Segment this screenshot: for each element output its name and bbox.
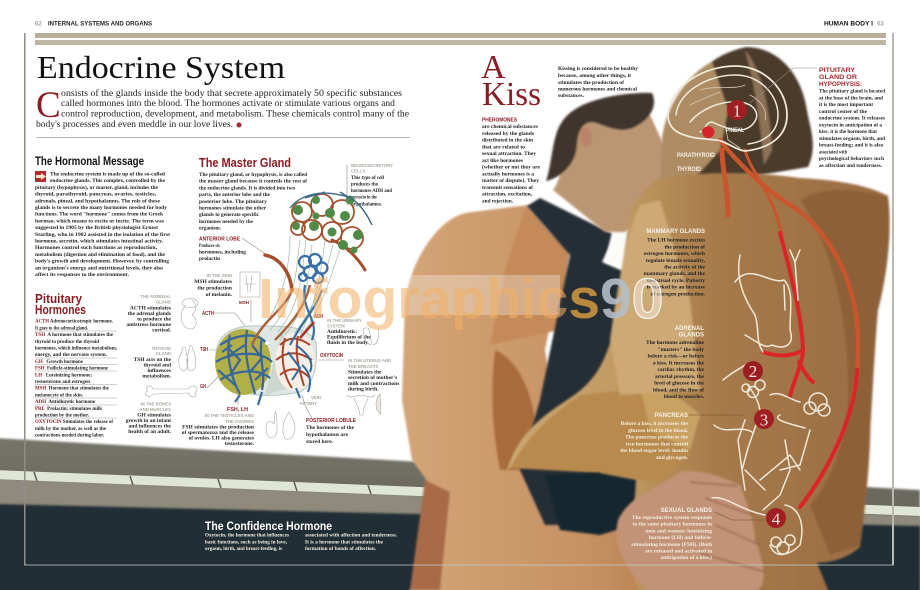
panel: adrenal glands: before a risk—or before [648,354,705,360]
arteries and veins [265,255,292,290]
panel: pheromones: released by the glands [482,131,534,137]
gap between figures [605,225,635,270]
panel: uterus and breasts: Stimulates the [348,370,382,376]
body text: organism. [199,226,222,232]
panel: thyroid gland: GLAND [156,351,171,356]
panel: uterus and breasts: during birth. [348,386,379,392]
anterior lobe note [199,237,246,262]
gland labels: MSH [239,300,249,306]
panel: pheromones: distributed in the skin [482,138,533,144]
kissing intro text: Kissing is considered to be healthy [558,66,638,72]
circle marker 3: 3 [760,410,768,430]
body text: parts, the anterior lobe and the [199,192,271,198]
panel: thyroid gland: THYROID [152,346,171,351]
body text: the endocrine glands. It is divided into two [199,185,295,191]
panel: mammary glands: menstrual cycle. Puberty [646,278,705,284]
body text: an organism's energy and nutritional levels, they also [35,265,163,271]
heading: a kiss [481,49,541,113]
photo: kissing couple [402,47,890,590]
panel: pheromones: that are related to [482,144,525,150]
heading: The Master Gland [199,155,291,170]
panel: urinary system: Antidiuretic. [327,329,358,335]
panel: pituitary gland or hypophysis: PITUITARY [819,67,856,74]
panel: sexual glands: to the same pituitary hormones in [633,522,712,528]
hormone list: production by the mother. [35,412,90,418]
neurosecretory cell cluster [290,192,372,254]
hormone list: OXYTOCIN Stimulates the release of [35,419,113,425]
body text: Hormones control such functions as reproduction, [35,245,158,251]
panel: in the skin: the production [197,286,232,292]
body text: formation of bonds of affection. [305,546,377,552]
panel: pancreas: and glycogen. [656,455,689,461]
icon: testes and ovary [266,412,295,439]
panel: pituitary gland or hypophysis: endocrine system. It releases [819,116,885,122]
panel: pancreas: PANCREAS [655,413,688,419]
gland labels on photo: PARATHYROID [677,153,716,159]
gland labels: ARTERY [299,401,317,406]
kissing intro text: substances. [558,93,585,99]
panel: sexual glands: stimulating hormone (FSH). (Both [631,541,712,548]
neurosecretory cells note [347,163,393,207]
leader lines [207,238,344,418]
header right: 63 [877,22,884,28]
panel: pancreas: Before a kiss, it increases the [621,421,689,427]
hormone list: LH Luteinizing hormone; [35,372,92,378]
panel: adrenal glands: ADRENAL [675,326,704,332]
panel: pheromones: attraction, excitation, [482,192,533,198]
body text: hormao, which means to excite or incite. The term was [35,218,164,224]
panel: pheromones: transmit sensations of [482,185,533,191]
diagram: hormone vessels [720,140,858,507]
title: Endocrine System [37,49,285,85]
hormone list: MSH Hormone that stimulates the [35,386,110,392]
panel: adrenal glands [646,326,705,400]
panel: testicles and ovaries: FSH stimulates the production [182,424,254,430]
photo background: wall and dark ground [0,438,920,590]
panel: pancreas: glucose level in the blood. [628,428,689,434]
panel: adrenal glands: blood to muscles. [664,394,705,400]
gland labels: ADH [314,314,323,320]
circle marker 2: 2 [749,362,757,381]
gland labels: ACTH [202,311,214,317]
panel: adrenal glands: GLANDS [679,333,704,339]
hormone list: GH Growth hormone [35,359,83,365]
panel: adrenal glands: arterial pressure, the [655,374,705,380]
body text: Starling, who in 1902 assisted in the isolation of the first [35,232,170,238]
panel: mammary glands: is marked by an increase [647,285,706,291]
hormone list: It goes to the adrenal gland. [35,325,89,331]
panel: urinary system: IN THE URINARY [327,318,362,323]
drop cap: C [36,85,61,126]
icon: skin section [240,272,260,297]
panel: posterior lobule: hypothalamus are [306,432,349,438]
man's jacket [402,205,700,590]
diagram: brain outline [668,66,787,151]
panel: pituitary gland or hypophysis: breast-feeding; and it is also [819,143,883,149]
panel: pituitary gland or hypophysis [750,67,885,169]
panel: adrenal glands: a kiss. It increases the [653,360,705,366]
panel: urinary system: fluids in the body. [327,340,370,346]
panel: mammary glands: The LH hormone excites [647,238,705,244]
panel: uterus and breasts: THE BREASTS [348,364,378,369]
panel: adrenal glands: The hormone adrenaline [646,340,705,346]
panel: urinary system: Equilibrium of the [327,334,371,340]
intro text: called hormones into the blood. The hormones activate or stimulate various organs and [61,99,395,109]
panel: sexual glands: anticipation of a kiss.) [660,554,712,561]
panel: in the skin: of melanin. [206,292,233,298]
neurosecretory cells note: CELLS [351,168,365,174]
panel: bones and muscles: IN THE BONES [140,402,171,407]
panel: pheromones: actually hormones is a [482,171,534,177]
hormone list: hormones, which influence metabolism, [35,346,118,352]
body text: suggested in 1905 by the British physiologist Ernest [35,225,158,231]
panel: adrenal gland [126,294,198,334]
panel: pituitary hormones [35,292,118,439]
hormone list: energy, and the nervous system. [35,352,108,358]
panel: in the skin: IN THE SKIN [206,273,232,278]
watermark: Infographics90 [258,267,663,331]
gland labels: TSH [200,347,208,353]
heading: a kiss: Kiss [482,76,541,113]
gland labels on photo [677,128,744,173]
neurosecretory cells note: NEUROSECRETORY [351,163,393,168]
body text [199,172,307,232]
heading: Pituitary [35,292,82,306]
panel: pituitary gland or hypophysis: associated with [819,149,847,155]
body text [205,533,398,552]
icon: pituitary spot [702,126,714,138]
panel: pheromones: sexual attraction. They [482,151,536,157]
panel: adrenal glands: level of glucose in the [654,380,705,386]
body text: pituitary (hypophysis), or master, gland, includes the [35,184,159,191]
panel: urinary system: SYSTEM [327,324,345,328]
anterior lobe note: hormones, including [199,250,246,256]
heading: a kiss: A [481,49,506,86]
panel: adrenal gland: cortisol. [152,328,172,334]
panel: mammary glands: regulate female sexuality, [646,258,706,264]
man's dark shirt [520,198,625,525]
icon: adrenal and kidney [181,298,198,329]
heading: The Confidence Hormone [205,519,332,533]
kissing intro text [558,66,638,99]
intro text: body's processes and even meddle in our love lives. [36,120,233,130]
circle marker 3 [754,409,774,430]
posterior lobe network [275,333,315,392]
body text: glands to generate specific [199,212,260,218]
panel: bones and muscles: AND MUSCLES [139,407,171,412]
woman's hood and jacket [507,173,890,590]
neurosecretory cells note: hormones ADH and [351,188,392,194]
chart: pituitary gland illustration [200,192,372,418]
blue plexus [299,254,328,283]
panel: mammary glands: estrogen hormones, which [644,251,705,257]
body text: hormone, secretin, which stimulates intestinal activity. [35,238,164,244]
icon: bone [146,386,197,397]
panel: thyroid gland: TSH acts on the [134,357,172,363]
panel: testicles and ovaries: of ovules. LH also generates [188,436,254,442]
intro text [36,85,409,130]
panel: posterior lobule: stored here. [306,439,334,445]
panel: the confidence hormone [205,519,398,552]
woman's hand [617,471,765,590]
panel: posterior lobule: POSTERIOR LOBULE [306,418,356,424]
panel: pituitary gland or hypophysis: GLAND OR [819,74,857,81]
panel: pituitary gland or hypophysis: psychological behaviors such [819,156,884,162]
body text: hormones needed by the [199,219,254,225]
circle marker 2 [743,361,763,381]
gland labels on photo: PINEAL [726,128,744,134]
icon: kidneys [363,328,379,345]
intro text: control reproduction, development, and metabolism. These chemicals control many of the [61,108,409,120]
hormone list: ADH Antidiuretic hormone [35,399,96,405]
panel: mammary glands: mammary glands, and the [644,271,706,277]
panel: adrenal glands: blood, and the flow of [653,387,704,393]
panel: pituitary gland or hypophysis: control center of the [819,109,868,115]
gland labels [200,300,343,406]
panel: bones and muscles: GH stimulates [137,413,171,419]
panel: mammary glands: the activity of the [664,264,706,270]
panel: testicles and ovaries: THE OVARIES [225,419,254,424]
panel: pheromones: are chemical substances [482,124,538,130]
hormone list: ACTH Adrenocorticotropic hormone. [35,319,114,325]
kissing intro text: numerous hormones and chemical [558,86,637,92]
panel: pancreas: The pancreas produces the [625,435,689,441]
header left: 62 [35,22,42,28]
panel: pheromones: PHEROMONES [482,118,517,124]
panel: in the skin: MSH stimulates [194,279,232,285]
panel: pituitary gland or hypophysis: oxytocin in anticipation of a [819,122,882,128]
heading [35,292,86,317]
icon: uterus and breast [347,394,381,415]
panel: sexual glands: men and women: luteinizing [646,528,712,534]
anterior lobe note: Produces six [199,243,220,249]
anterior lobe note: ANTERIOR LOBE [199,237,240,243]
body text: adrenals, pineal, and hypothalamus. The role of these [35,198,161,204]
panel: testicles and ovaries [182,407,295,447]
hormone list: PRL Prolactin: stimulates milk [35,406,103,412]
panel: the master gland text [199,155,393,262]
panel: pheromones: act like hormones [482,158,523,164]
neurosecretory cells note: produces the [351,182,379,188]
panel: adrenal glands: cardiac rhythm, the [657,367,705,373]
panel: uterus and breasts: IN THE UTERUS AND [348,358,391,363]
body text: associated with affection and tenderness. [305,533,398,539]
gland labels: GH [200,384,206,390]
gland labels on photo: THYROID [677,167,702,173]
panel: pheromones: (whether or not they are [482,164,541,170]
panel: testicles and ovaries: of spermatozoa and the release [182,430,255,436]
panel: thyroid gland: thyroid and [143,363,171,369]
panel: testicles and ovaries: FSH, LH [227,407,248,413]
panel: pituitary gland or hypophysis: stimulates orgasm, birth, and [819,136,885,142]
panel: uterus and breasts [347,358,399,415]
header left: INTERNAL SYSTEMS AND ORGANS [48,22,152,28]
panel: pheromones: matter of dispute). They [482,177,539,184]
panel: mammary glands [644,229,706,297]
panel: thyroid gland: influences [147,368,171,374]
body text: endocrine glands. This complex, controlled by the [50,178,166,184]
anterior lobe note: prolactin [199,256,220,262]
body text: It is a hormone that stimulates the [305,540,384,546]
header right: HUMAN BODY I [824,22,873,28]
hormone list: FSH Follicle-stimulating hormone [35,366,108,372]
panel: mammary glands: the production of [664,244,705,250]
icon: red arrow marker [35,171,46,182]
panel: pituitary gland or hypophysis: as affection and tenderness. [819,163,883,169]
panel: mammary glands: MAMMARY GLANDS [646,229,705,235]
panel: pituitary gland or hypophysis: The pituitary gland is located [819,89,885,95]
panel: sexual glands: SEXUAL GLANDS [661,508,712,514]
panel: bones and muscles: growth in an infant [126,418,171,424]
body text: Oxytocin, the hormone that influences [205,533,289,539]
body text: posterior lobe. The pituitary [199,199,267,205]
panel: adrenal gland: ACTH stimulates [130,306,171,312]
panel: urinary system [327,318,379,346]
man's head [546,93,680,232]
body text: functions. The word "hormone" comes from the Greek [35,212,164,218]
hormone list: contractions needed during labor. [35,433,105,439]
gland labels: VEIN [311,395,321,400]
panel: posterior lobule: The hormones of the [306,425,355,431]
woman's dark cuff [545,473,636,535]
panel: pituitary gland or hypophysis: HYPOPHYSIS: [819,81,862,88]
panel: thyroid gland [134,346,196,380]
panel: pheromones [482,118,541,204]
panel: sexual glands: The reproductive system responds [632,515,712,521]
panel: pancreas: two hormones that control [626,441,688,447]
panel: adrenal gland: the adrenal glands [128,311,171,317]
body text: glands is to secrete the many hormones needed for body [35,205,167,211]
body text: The pituitary gland, or hypophysis, is also called [199,172,307,178]
hormone list [35,319,118,439]
panel: adrenal gland: antistress hormone [126,322,172,328]
hormone list: thyroid to produce the thyroid [35,339,99,345]
panel: uterus and breasts: secretion of mother's [348,375,397,381]
panel: adrenal gland: THE ADRENAL [140,294,171,299]
panel: sexual glands: hormone (LH) and follicle- [649,534,712,541]
body text: the master gland because it controls the rest of [199,179,307,185]
capsule [216,326,316,396]
neurosecretory cells note: hypothalamus. [351,201,383,207]
neurosecretory cells note: This type of cell [351,175,384,181]
icon: thyroid [179,346,196,371]
body text: thyroid, parathyroid, pancreas, ovaries, testicles, [35,192,157,198]
panel: posterior lobule [306,418,356,445]
panel: pituitary gland or hypophysis: kiss; it is the hormone that [819,129,877,135]
body text [35,172,170,278]
body text: affect its responses to the environment. [35,272,130,278]
panel: testicles and ovaries: IN THE TESTICLES AND [205,413,254,418]
panel: pituitary gland or hypophysis: at the base of the brain, and [819,95,883,101]
kissing intro text: stimulates the production of [558,80,624,86]
panel: bones and muscles: and influences the [129,424,172,430]
hormone list: milk by the mother, as well as the [35,426,106,432]
body text: hormones stimulate the other [199,206,267,212]
circle marker 1: 1 [733,102,741,120]
panel: uterus and breasts: milk and contractions [348,381,399,387]
panel: bones and muscles [126,386,197,435]
woman's hair [660,47,813,180]
body text: metabolism (digestion and elimination of food), and the [35,251,166,258]
panel: in the skin [194,272,260,298]
panel: pheromones: and rejection. [482,198,514,204]
panel: sexual glands [631,508,765,561]
panel: adrenal gland: GLAND [156,300,171,305]
gland labels: OXYTOCIN [320,353,343,359]
heading: Hormones [35,303,86,317]
body text: body's growth and development. However, by controlling [35,259,169,265]
body text: orgasm, birth, and breast-feeding, is [205,546,282,552]
circle marker 1 [727,100,747,120]
body text: The endocrine system is made up of the so-called [50,172,165,178]
panel: adrenal glands: "musters" the body [658,347,704,353]
diagram: thoracic and abdominal organs [712,250,830,554]
panel: pancreas: the blood-sugar level: insulin [620,448,688,454]
panel: bones and muscles: health of an adult. [128,429,172,435]
intro text: onsists of the glands inside the body that secrete approximately 50 specific substances [61,88,402,99]
circle marker 4: 4 [772,510,781,528]
hormone list: melanocyte of the skin. [35,392,84,398]
panel: thyroid gland: metabolism. [142,374,172,380]
kissing intro text: because, among other things, it [558,73,631,79]
anterior lobe network [215,329,272,395]
panel: testicles and ovaries: testosterone. [225,441,255,447]
panel: the hormonal message [35,154,170,278]
hormone list: TSH A hormone that stimulates the [35,332,114,338]
body text: basic functions, such as being in love, [205,540,288,546]
neurosecretory cells note: oxytocin in the [351,195,377,201]
heading: The Hormonal Message [35,154,144,168]
panel: pancreas [620,413,743,461]
circle marker 4 [766,508,786,528]
hormone list: testosterone and estrogen [35,379,90,385]
panel: sexual glands: are released and activated in [645,548,712,554]
panel: mammary glands: of estrogen production. [651,291,706,297]
panel: pituitary gland or hypophysis: it is the most important [819,102,873,108]
stalk [262,235,340,335]
panel: adrenal gland: to produce the [137,317,172,323]
